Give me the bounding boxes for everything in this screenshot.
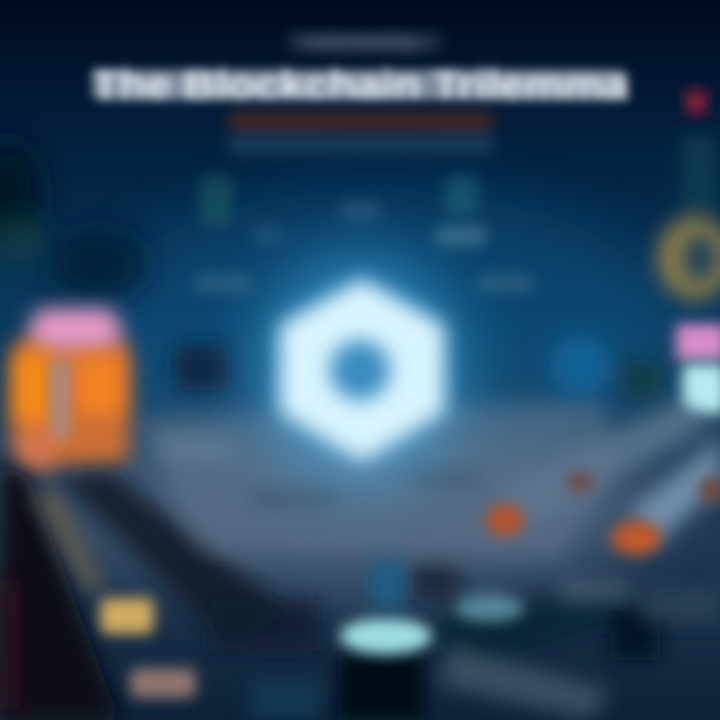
right tower xyxy=(657,90,720,414)
central glowing hexagon xyxy=(255,253,465,483)
eyebrow text: Understanding xyxy=(305,33,415,52)
left dark silhouette xyxy=(0,140,148,300)
bottom pedestal xyxy=(250,560,524,720)
top labels xyxy=(195,175,533,292)
bottom right panels xyxy=(440,580,720,720)
orange tips xyxy=(486,472,720,555)
side dark panels near hexagon xyxy=(175,335,662,402)
lower grid of dark bars xyxy=(60,400,720,670)
yellow and pink chips xyxy=(100,598,196,698)
subtitle bar xyxy=(228,112,493,154)
left dark foreground xyxy=(0,460,120,720)
title: The Blockchain Trilemma xyxy=(92,61,629,108)
left orange card xyxy=(14,308,130,470)
